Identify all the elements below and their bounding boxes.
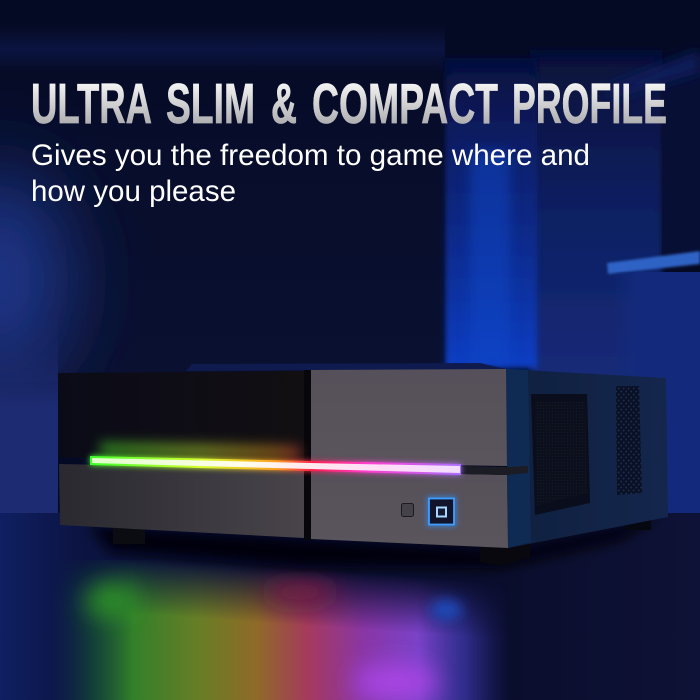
device shadow and feet [90, 512, 660, 568]
blue curtain [445, 58, 537, 368]
title: & [271, 72, 297, 136]
reflection: blue spot [430, 599, 462, 621]
side vent: hex mesh [616, 386, 642, 495]
case top edge [186, 363, 506, 371]
lower right wall [612, 272, 700, 516]
right side slot [461, 466, 528, 475]
reflection band [50, 560, 510, 700]
reflection: green highlight [86, 584, 138, 616]
reflection: red [264, 582, 336, 602]
power button with blue light [429, 498, 454, 524]
left blue glow [0, 170, 70, 390]
side corner strip [506, 369, 531, 548]
upper left front panel [58, 371, 304, 463]
desk surface with RGB reflection [0, 513, 700, 700]
RGB light strip [90, 442, 461, 475]
device: mini PC case [58, 363, 668, 548]
subtitle [31, 139, 590, 208]
dark right wall [662, 70, 700, 255]
center gap [304, 370, 311, 540]
title: ULTRA [31, 72, 152, 136]
side vent: square grille [531, 394, 590, 515]
title [31, 72, 667, 136]
stone pillar [530, 50, 662, 380]
dark left wall [0, 62, 442, 382]
standby button [402, 504, 414, 516]
strip core [92, 458, 460, 473]
upper wall band [0, 25, 445, 75]
side panel [506, 369, 668, 548]
strip glow [100, 442, 300, 460]
subtitle: Gives you the freedom to game where and [31, 139, 590, 172]
title: SLIM [166, 72, 255, 136]
lower right front panel [311, 471, 508, 548]
lower left front panel [59, 464, 304, 538]
reflection: bright violet [353, 664, 437, 700]
upper right beam [610, 50, 700, 100]
subtitle: how you please [31, 175, 236, 208]
title: COMPACT [312, 72, 498, 136]
upper right front panel [311, 369, 507, 466]
shelf [607, 251, 700, 274]
strip body [90, 456, 461, 475]
